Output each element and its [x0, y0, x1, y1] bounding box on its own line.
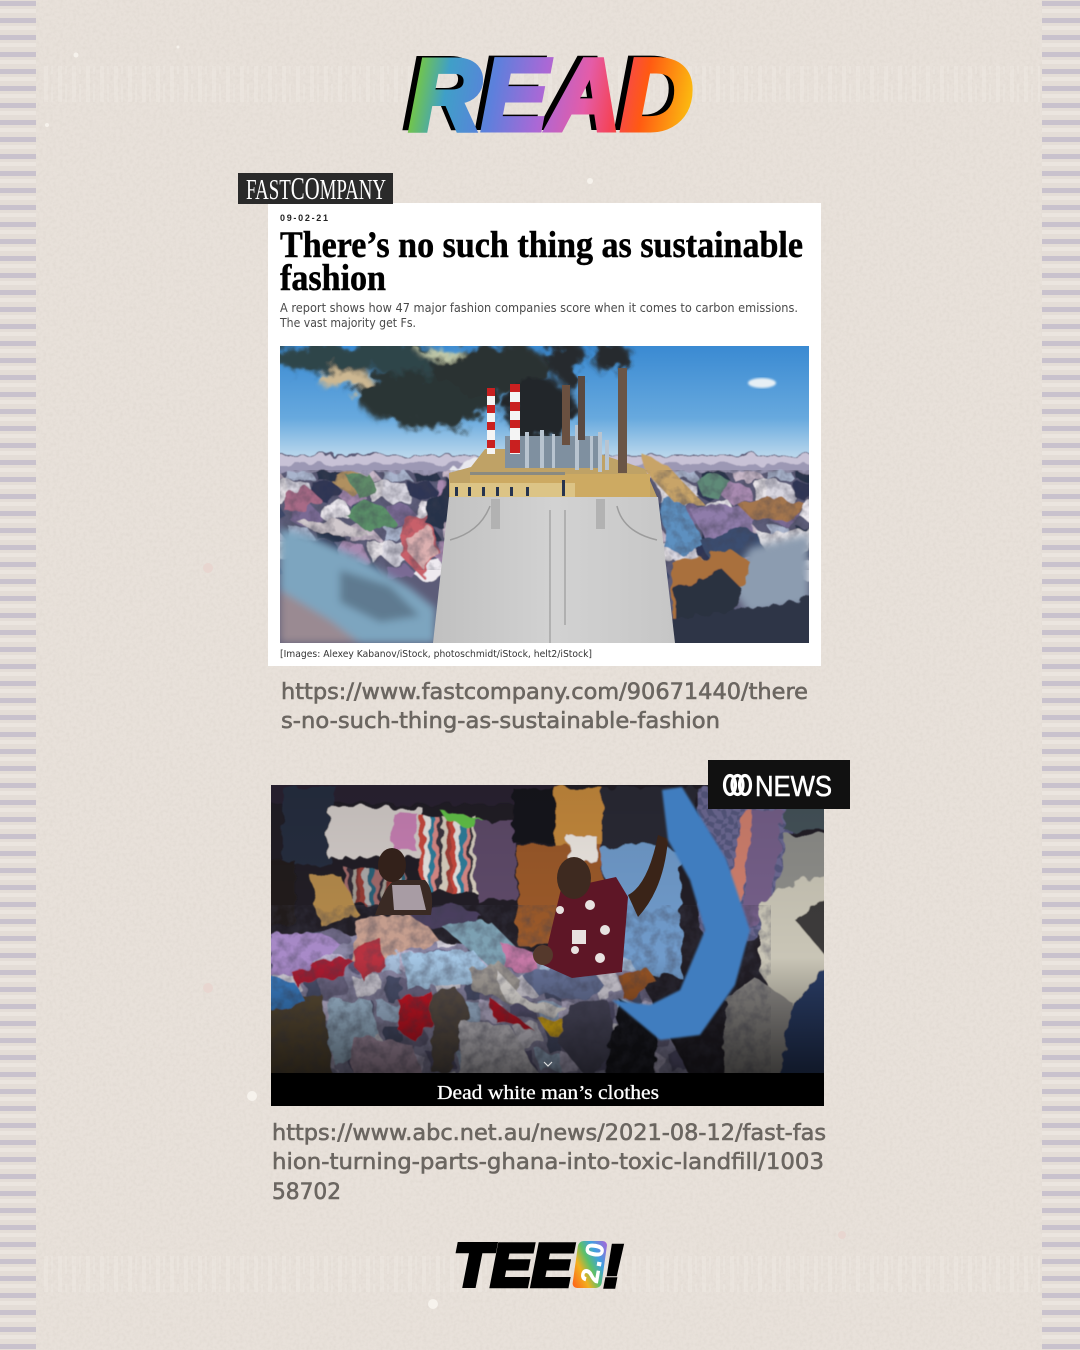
article deck — [279, 301, 798, 330]
ABC News logo: NEWS — [755, 771, 832, 803]
link: ABC News URL: https://www.abc.net.au/news/2021-08-12/fast-fas — [272, 1121, 826, 1146]
market stall clothes pile — [265, 904, 691, 1079]
article card — [268, 203, 821, 666]
article headline: fashion — [280, 258, 386, 299]
panel: ABC News article — [265, 760, 850, 1106]
ABC News logo — [708, 760, 850, 809]
article deck: A report shows how 47 major fashion companies score when it comes to carbon emissions. — [280, 301, 798, 315]
seller left — [375, 848, 432, 915]
link: Fast Company URL: https://www.fastcompany.com/90671440/there — [281, 680, 808, 705]
link: ABC News URL — [272, 1121, 826, 1205]
Fast Company logo: FASTCOMPANY — [246, 170, 386, 206]
logo: TEE 2.0: ! — [603, 1233, 623, 1300]
article date: 09-02-21 — [280, 213, 328, 223]
blue shirt held up — [612, 787, 750, 1040]
side stripes right — [1042, 0, 1080, 1350]
caption bar: Dead white man’s clothes — [437, 1082, 659, 1104]
link: ABC News URL: 58702 — [272, 1180, 341, 1205]
seller right — [533, 835, 668, 978]
jeans — [433, 497, 675, 643]
factory — [449, 368, 657, 497]
photo: second-hand clothes market — [265, 780, 830, 1079]
logo: TEE 2.0: 2.0 — [576, 1241, 610, 1285]
link: ABC News URL: hion-turning-parts-ghana-into-toxic-landfill/1003 — [272, 1150, 824, 1175]
title: READ: READ — [403, 36, 687, 150]
photo caption: [Images: Alexey Kabanov/iStock, photoschmidt/iStock, helt2/iStock] — [280, 649, 592, 660]
scroll chevron — [544, 1062, 552, 1066]
article headline: There’s no such thing as sustainable — [280, 225, 803, 266]
caption bar — [271, 1073, 824, 1106]
clothes pile — [270, 452, 820, 655]
logo: TEE 2.0 — [454, 1232, 623, 1300]
article headline — [280, 225, 803, 299]
link: Fast Company URL: s-no-such-thing-as-sustainable-fashion — [281, 709, 720, 734]
photo: factory on jeans among clothes — [280, 346, 809, 643]
logo: TEE 2.0: TEE — [454, 1232, 574, 1299]
title: READ: READ — [409, 38, 693, 152]
link: Fast Company URL — [281, 680, 808, 734]
side stripes left — [0, 0, 36, 1350]
panel: Fast Company article — [238, 170, 821, 666]
article deck: The vast majority get Fs. — [279, 316, 416, 330]
